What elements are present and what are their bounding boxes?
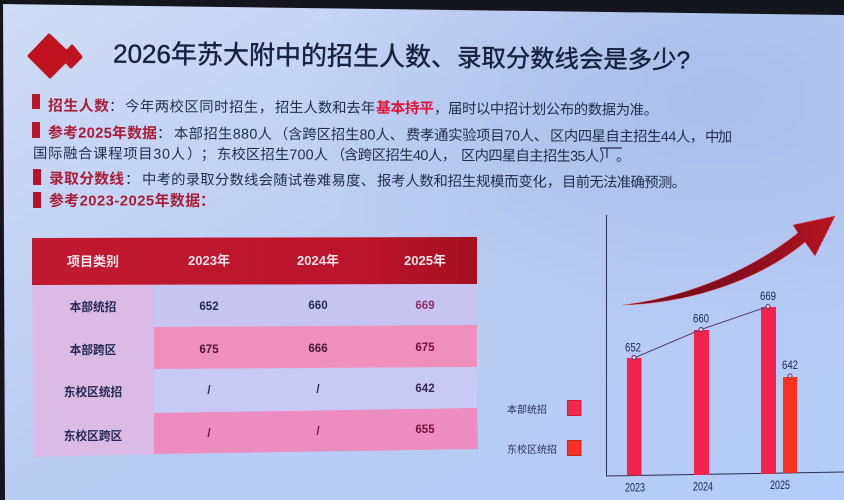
legend: 本部统招 bbox=[507, 403, 547, 416]
arrow: rising trend bbox=[623, 216, 835, 305]
text block: 2025 reference data: ） bbox=[599, 148, 613, 165]
year labels: 2023 bbox=[625, 482, 645, 494]
legend: 东校区统招 bbox=[507, 443, 557, 456]
text block: 2025 reference data bbox=[32, 122, 732, 165]
first column: 本部统招 bbox=[70, 300, 116, 314]
bars bbox=[627, 307, 797, 476]
text block: 2025 reference data: （ bbox=[331, 147, 345, 164]
row: 东校区跨区: 655 bbox=[415, 424, 435, 436]
text block: 2025 reference data: 区内四星自主招生35人 bbox=[461, 147, 599, 165]
table header row: 2024年 bbox=[297, 253, 339, 268]
text block: enrollment numbers: 招生人数 bbox=[48, 97, 109, 115]
text block: enrollment numbers: 届时以中招计划公布的数据为准。 bbox=[448, 100, 658, 119]
year labels: 2025 bbox=[770, 480, 790, 492]
row: 本部统招: 660 bbox=[308, 300, 328, 312]
title: 录取分数线会是多少? bbox=[457, 45, 690, 75]
icon: red diamond logo bbox=[29, 35, 81, 77]
year labels: 2024 bbox=[693, 482, 713, 494]
text block: 2025 reference data: 东校区招生700人 bbox=[217, 146, 328, 164]
text block: admission score line: 录取分数线 bbox=[49, 170, 124, 188]
text block: enrollment numbers: ： bbox=[109, 99, 123, 115]
text block: 2025 reference data: ）； bbox=[187, 146, 215, 163]
row: 东校区跨区: / bbox=[316, 426, 320, 438]
chart axes bbox=[606, 215, 844, 476]
text block: admission score line: ： bbox=[125, 172, 139, 188]
row: 东校区跨区 bbox=[154, 408, 478, 454]
value labels: 669 bbox=[760, 291, 776, 303]
text block: admission score line: 中考的录取分数线会随试卷难易度、 bbox=[142, 171, 375, 189]
text block: 2025 reference data: 参考2025年数据 bbox=[48, 124, 157, 142]
text block: enrollment numbers: 基本持平 bbox=[376, 99, 434, 117]
text block: admission score line bbox=[33, 169, 686, 191]
text block: 2025 reference data: 费孝通实验项目70人、 bbox=[406, 127, 548, 145]
table header row: 2025年 bbox=[404, 253, 446, 268]
text block: 2025 reference data: ： bbox=[157, 126, 171, 142]
row: 东校区统招: / bbox=[316, 384, 320, 396]
row: 东校区统招 bbox=[154, 367, 477, 413]
value labels: 652 bbox=[625, 342, 641, 354]
text block: 2025 reference data: 本部招生880人 bbox=[174, 125, 272, 143]
text block: 2025 reference data: （ bbox=[274, 126, 288, 143]
text block: 2023-2025 reference heading: 参考2023-2025年数据 bbox=[49, 192, 200, 210]
text block: 2025 reference data: 区内四星自主招生44人， bbox=[550, 128, 704, 146]
trend line bbox=[632, 304, 792, 378]
row: 本部跨区: 666 bbox=[308, 343, 328, 355]
table header row bbox=[32, 237, 477, 285]
text block: admission score line: 目前无法准确预测。 bbox=[562, 174, 686, 191]
title bbox=[113, 39, 690, 75]
first column: 东校区跨区 bbox=[64, 429, 123, 443]
first column bbox=[32, 285, 154, 457]
row: 本部统招: 669 bbox=[415, 300, 435, 312]
row: 本部统招 bbox=[154, 284, 477, 327]
value labels: 642 bbox=[782, 360, 798, 372]
year labels bbox=[625, 480, 790, 494]
title: 2026年苏大附中的招生人数 bbox=[113, 39, 431, 72]
value labels bbox=[625, 291, 798, 372]
bar chart: scores by year bbox=[606, 215, 844, 494]
first column: 本部跨区 bbox=[70, 343, 117, 357]
row: 本部跨区: 675 bbox=[199, 344, 219, 356]
text block: 2025 reference data: 国际融合课程项目30人 bbox=[33, 145, 185, 163]
legend bbox=[507, 400, 581, 456]
text block: enrollment numbers: 招生人数和去年 bbox=[275, 99, 375, 117]
text block: 2025 reference data: 。 bbox=[616, 149, 630, 165]
text block: enrollment numbers: 今年两校区同时招生， bbox=[125, 98, 273, 116]
text block: enrollment numbers: ， bbox=[434, 101, 448, 117]
text block: 2025 reference data: 中加 bbox=[705, 129, 732, 146]
row: 东校区跨区: / bbox=[207, 428, 211, 440]
title: 、 bbox=[431, 44, 456, 72]
text block: admission score line: 报考人数和招生规模而变化， bbox=[377, 173, 561, 191]
text block: 2025 reference data: 含跨区招生80人、 bbox=[288, 126, 404, 144]
first column: 东校区统招 bbox=[64, 385, 122, 399]
row: 东校区统招: 642 bbox=[415, 383, 435, 395]
row: 本部跨区: 675 bbox=[415, 342, 435, 354]
table: admission scores bbox=[32, 237, 478, 457]
table header row: 2023年 bbox=[188, 253, 230, 268]
value labels: 660 bbox=[693, 314, 709, 326]
row: 本部跨区 bbox=[154, 325, 477, 369]
text block: 2023-2025 reference heading: ： bbox=[200, 194, 215, 210]
table header row: 项目类别 bbox=[67, 254, 119, 269]
text block: 2025 reference data: 含跨区招生40人， bbox=[344, 147, 456, 164]
row: 本部统招: 652 bbox=[199, 301, 219, 313]
text block: enrollment numbers bbox=[32, 94, 658, 119]
row: 东校区统招: / bbox=[207, 385, 211, 397]
